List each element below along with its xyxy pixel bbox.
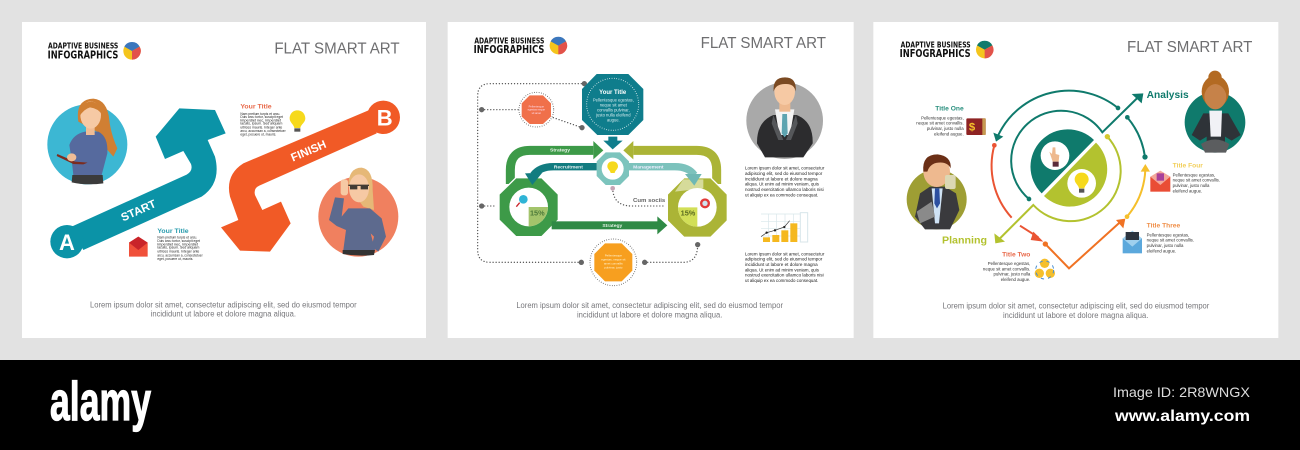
text block: your title bottom: imperdiet nec, imperdiet: [157, 242, 198, 246]
text block: your title top: Nam pretium turpis et arcu.: [240, 112, 280, 116]
text block: title two: [983, 251, 1031, 282]
text block: your title bottom: Duis arcu tortor, suscipit eget: [157, 239, 200, 243]
logo: INFOGRAPHICS: [48, 49, 118, 61]
person: businesswoman: [1185, 71, 1245, 153]
ring: inner teal arrow: [1011, 93, 1143, 201]
person: businessman with tablet: [907, 154, 967, 229]
text block: title one: eleifend augue.: [934, 131, 964, 136]
footer text: [943, 302, 1210, 320]
text block: your title bottom: iaculis, ipsum. Sed aliquam: [157, 246, 200, 250]
text block: right upper: Lorem ipsum dolor sit amet, consectetur: [745, 166, 825, 171]
text block: right lower: [745, 251, 825, 283]
text block: your title bottom: [157, 228, 204, 261]
logo: [900, 40, 993, 60]
footer text: Lorem ipsum dolor sit amet, consectetur adipiscing elit, sed do eiusmod tempor: [943, 302, 1210, 311]
text block: your title top: iaculis, ipsum. Sed aliquam: [240, 122, 283, 126]
arrow: strategy bottom: Strategy: [602, 223, 623, 229]
text block: your title bottom: Nam pretium turpis et arcu.: [157, 236, 197, 240]
footer text: Lorem ipsum dolor sit amet, consectetur adipiscing elit, sed do eiusmod tempor: [516, 301, 783, 310]
text block: right upper: adipiscing elit, sed do eiusmod tempor: [745, 171, 823, 176]
ring: inner lime arrow: [994, 134, 1121, 243]
octagon: yellow: [590, 239, 637, 286]
octagon: yellow: pulvinar, justo: [604, 266, 623, 270]
arrow: finish: FINISH: [289, 139, 328, 164]
text block: title four: eleifend augue.: [1173, 188, 1202, 193]
chart: bars and line: [761, 213, 808, 242]
alamy logo: alamy: [50, 370, 151, 432]
text block: title three: [1147, 222, 1194, 253]
text block: your title top: Your Title: [240, 104, 272, 111]
text block: title four: Title Four: [1173, 162, 1203, 169]
title: FLAT SMART ART: [1127, 39, 1253, 56]
text block: your title bottom: Your Title: [157, 228, 189, 235]
text block: right lower: ut aliquip ex ea commodo consequat.: [745, 278, 818, 283]
text block: right lower: aliqua. Ut enim ad minim veniam, quis: [745, 267, 820, 272]
text block: right lower: incididunt ut labore et dolore magna: [745, 262, 818, 267]
text block: title one: [916, 106, 964, 136]
person: woman with notebook: [47, 99, 127, 184]
octagon: your title: justo nulla eleifend: [595, 113, 631, 118]
footer text: [90, 300, 357, 319]
title: FLAT SMART ART: [701, 35, 827, 52]
icon: envelope: [129, 237, 148, 257]
person: businessman: [746, 77, 823, 159]
text block: title one: Title One: [935, 106, 964, 113]
arrow: down: [603, 137, 623, 149]
text block: title one: Pellentesque egestas,: [921, 115, 964, 120]
octagon: center bulb: [597, 152, 629, 185]
octagon: right olive: [667, 178, 727, 237]
text block: title three: eleifend augue.: [1147, 248, 1176, 253]
octagon: orange small: egestas neque: [528, 108, 546, 112]
logo: INFOGRAPHICS: [900, 48, 971, 60]
arc: yellow right: [1125, 164, 1150, 219]
text block: title three: pulvinar, justo nulla: [1147, 243, 1184, 248]
person: woman with glasses: [318, 168, 398, 257]
octagon: your title: convallis pulvinar,: [597, 108, 630, 113]
text block: title two: pulvinar, justo nulla: [994, 272, 1031, 277]
octagon: left green: 15%: [530, 208, 545, 217]
text block: your title top: Duis arcu tortor, suscipit eget: [240, 115, 283, 119]
logo: ADAPTIVE BUSINESS: [48, 42, 118, 51]
arrow: start: [50, 108, 226, 258]
footer text: incididunt ut labore et dolore magna aliqua.: [151, 310, 296, 319]
octagon: your title: neque sit amet: [600, 103, 628, 108]
icon: wallet: $: [969, 122, 976, 134]
footer text: incididunt ut labore et dolore magna aliqua.: [1003, 311, 1148, 320]
bottom black bar: [0, 360, 1300, 450]
logo: [48, 42, 141, 61]
text block: title four: pulvinar, justo nulla: [1173, 183, 1210, 188]
logo: INFOGRAPHICS: [474, 44, 544, 56]
text block: title four: neque sit amet convallis.: [1173, 178, 1220, 183]
footer text: Lorem ipsum dolor sit amet, consectetur adipiscing elit, sed do eiusmod tempor: [90, 300, 357, 309]
text block: title two: Pellentesque egestas,: [988, 261, 1030, 266]
text block: title three: Pellentesque egestas,: [1147, 232, 1189, 237]
arc: red left: [992, 143, 1043, 242]
icon: light bulb: [290, 110, 305, 132]
label: analysis: Analysis: [1147, 90, 1189, 101]
arrow: management: Management: [633, 164, 664, 170]
text block: right upper: nostrud exercitation ullamco laboris nisi: [745, 187, 824, 192]
text block: your title top: eget, posuere ut, mauris.: [240, 133, 276, 137]
text block: title four: Pellentesque egestas,: [1173, 172, 1215, 177]
octagon: yellow: Pellentesque: [605, 254, 622, 258]
text block: your title top: [240, 104, 287, 137]
text block: right lower: Lorem ipsum dolor sit amet, consectetur: [745, 251, 825, 256]
text block: title four: [1173, 162, 1220, 193]
title: FLAT SMART ART: [274, 40, 400, 57]
arrow: strategy top: Strategy: [550, 148, 570, 154]
panel: circular arrows: [873, 22, 1278, 338]
icon: coins: [1035, 259, 1055, 279]
dotted connectors: [478, 81, 700, 265]
text block: title two: neque sit amet convallis.: [983, 266, 1030, 271]
arrow: orange chevron: [1043, 219, 1125, 268]
text block: your title top: imperdiet nec, imperdiet: [240, 118, 281, 122]
website: www.alamy.com: [1114, 408, 1250, 425]
arrow: finish: [221, 101, 400, 252]
arc: outer teal: [993, 91, 1120, 142]
image id: Image ID: 2R8WNGX: [1113, 384, 1251, 400]
arc: teal right: [1125, 115, 1148, 160]
text block: right upper: incididunt ut labore et dolore magna: [745, 176, 818, 181]
octagon: right olive: 15%: [681, 208, 696, 217]
arrow: olive return: [623, 141, 717, 184]
octagon: your title: augue.: [607, 118, 620, 123]
octagon: orange small: Pellentesque: [529, 104, 545, 108]
arrow: recruitment: Recruitment: [554, 164, 583, 170]
icon: blue envelope: [1123, 231, 1142, 253]
panel: process cycle: [448, 22, 854, 338]
icon: red envelope: [1150, 171, 1170, 192]
text block: right upper: [745, 166, 825, 197]
logo: ADAPTIVE BUSINESS: [474, 36, 544, 45]
arrow: start: A: [59, 230, 75, 255]
text block: your title top: ultrices mauris. Integer ante: [240, 125, 282, 129]
text block: your title bottom: eget, posuere ut, mauris.: [157, 257, 193, 261]
logo: ADAPTIVE BUSINESS: [901, 40, 971, 49]
text block: title three: Title Three: [1147, 222, 1180, 229]
octagon: left green: [499, 178, 558, 237]
arrow: finish: B: [377, 105, 393, 130]
octagon: orange small: [519, 92, 554, 127]
text block: title three: neque sit amet convallis.: [1147, 238, 1194, 243]
icon: wallet: [966, 118, 986, 135]
pie center: [1030, 129, 1107, 207]
text block: right upper: ut aliquip ex ea commodo consequat.: [745, 192, 818, 197]
octagon: your title: Your Title: [599, 90, 627, 96]
text block: title two: Title Two: [1002, 251, 1030, 258]
arrow: strategy bottom: [552, 216, 667, 234]
text block: right lower: nostrud exercitation ullamco laboris nisi: [745, 273, 824, 278]
label: cum sociis: Cum sociis: [633, 198, 665, 204]
octagon: yellow: egestas, neque sit: [601, 258, 626, 262]
label: planning: Planning: [942, 235, 987, 246]
panel: start finish: [22, 22, 426, 338]
octagon: orange small: sit amet: [532, 111, 541, 115]
arrow: recruitment: [525, 164, 597, 185]
page background: [0, 0, 1300, 360]
text block: your title top: arcu, accumsan a, consectetuer: [240, 129, 287, 133]
footer text: [516, 301, 783, 319]
text block: right upper: aliqua. Ut enim ad minim veniam, quis: [745, 182, 820, 187]
octagon: yellow: amet convallis: [604, 262, 623, 266]
text block: your title bottom: ultrices mauris. Integer ante: [157, 250, 199, 254]
text block: title one: pulvinar, justo nulla: [927, 126, 964, 131]
arrow: management: [629, 164, 702, 186]
text block: title one: neque sit amet convallis.: [916, 121, 964, 126]
octagon: your title: Pellentesque egestas,: [593, 98, 634, 103]
text block: title two: eleifend augue.: [1001, 277, 1030, 282]
arrow: strategy top: [510, 141, 603, 184]
arrow: start: START: [119, 198, 158, 224]
text block: right lower: adipiscing elit, sed do eiusmod tempor: [745, 257, 823, 262]
text block: your title bottom: arcu, accumsan a, consectetuer: [157, 253, 204, 257]
logo: [474, 36, 567, 56]
footer text: incididunt ut labore et dolore magna aliqua.: [577, 310, 722, 319]
octagon: your title: [582, 74, 643, 135]
